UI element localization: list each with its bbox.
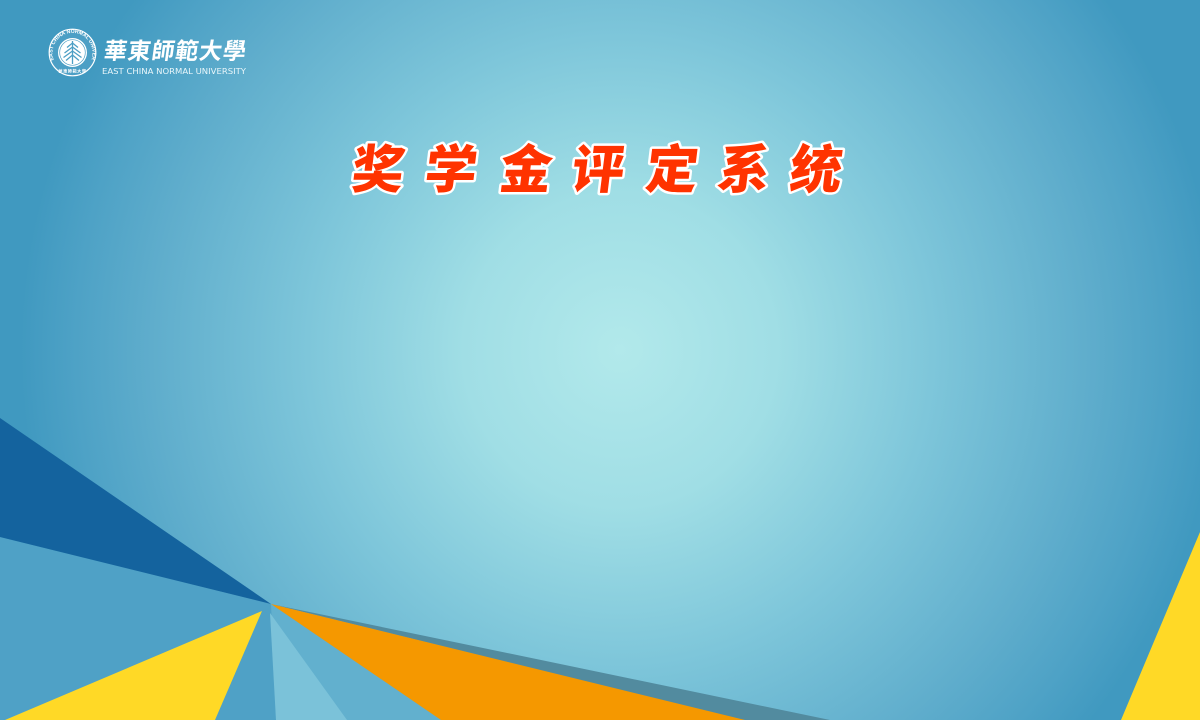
icon: pine tree <box>64 41 82 64</box>
base blue fan <box>0 537 441 720</box>
decorative triangles: bottom left fan <box>0 418 830 720</box>
grey shadow triangle <box>271 604 830 720</box>
orange triangle <box>271 604 745 720</box>
mid blue wedge <box>271 604 441 720</box>
university name in Chinese: 華東師範大學 <box>102 38 248 64</box>
university logo <box>48 28 248 76</box>
title <box>349 142 846 200</box>
title: 金 <box>497 142 556 200</box>
title: 统 <box>787 142 846 200</box>
dark blue triangle <box>0 418 271 604</box>
icon: university seal <box>48 28 96 76</box>
title: 定 <box>643 142 702 200</box>
seal lower text: 華東師範大學 <box>58 68 87 74</box>
title: 评 <box>569 142 628 200</box>
yellow triangle: bottom right <box>1121 532 1200 720</box>
yellow triangle <box>5 611 262 720</box>
title: 系 <box>715 142 774 200</box>
title: 学 <box>422 142 481 200</box>
university name in English: EAST CHINA NORMAL UNIVERSITY <box>102 67 246 76</box>
light blue wedge <box>270 613 347 720</box>
title: 奖 <box>349 142 408 200</box>
